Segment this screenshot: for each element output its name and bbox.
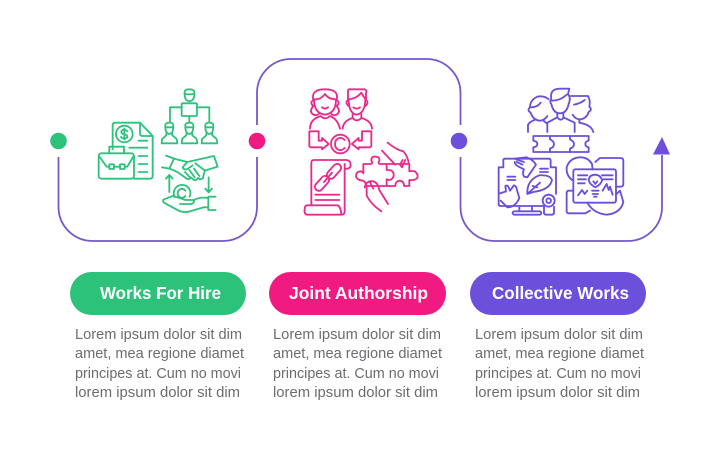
pill: Works For Hire	[70, 272, 246, 315]
text block: column 2: lorem ipsum dolor sit dim	[273, 384, 438, 401]
icon: arrows to copyright	[309, 131, 371, 153]
pill: Works For Hire: Works For Hire	[100, 283, 221, 303]
text block: column 2	[273, 326, 443, 401]
arrow head: purple triangle	[653, 137, 670, 154]
text block: column 3: amet, mea regione diamet	[475, 345, 645, 362]
marker: purple dot	[451, 133, 467, 149]
icon: org chart	[162, 89, 217, 143]
text block: column 1: principes at. Cum no movi	[75, 365, 241, 382]
timeline connector line	[58, 59, 662, 241]
marker: green dot	[50, 133, 67, 149]
text block: column 1: lorem ipsum dolor sit dim	[75, 384, 240, 401]
icon: monitor with hands and feather	[499, 157, 556, 215]
marker: pink dot	[249, 133, 265, 149]
icon: group of people	[528, 89, 593, 132]
text block: column 3: principes at. Cum no movi	[475, 365, 641, 382]
icon: puzzle strip	[533, 136, 589, 152]
icon: contract document	[113, 123, 153, 179]
text block: column 2: amet, mea regione diamet	[273, 345, 443, 362]
pill: Joint Authorship: Joint Authorship	[289, 283, 428, 303]
icon: hand with copyright coin	[163, 185, 216, 212]
pill: Joint Authorship	[269, 272, 446, 315]
icon: joint authorship	[305, 89, 418, 215]
icon: man	[343, 89, 372, 129]
text block: column 2: Lorem ipsum dolor sit dim	[273, 326, 441, 343]
text block: column 2: principes at. Cum no movi	[273, 365, 439, 382]
text block: column 1	[75, 326, 245, 401]
pill: Collective Works	[470, 272, 646, 315]
text block: column 3: Lorem ipsum dolor sit dim	[475, 326, 643, 343]
text block: column 1: amet, mea regione diamet	[75, 345, 245, 362]
text block: column 3	[475, 326, 645, 401]
icon: collective works	[499, 89, 623, 215]
text block: column 1: Lorem ipsum dolor sit dim	[75, 326, 242, 343]
icon: briefcase	[99, 147, 134, 179]
icon: scroll with chain link	[305, 160, 351, 215]
icon: works for hire	[99, 89, 218, 212]
icon: handshake	[162, 156, 218, 180]
icon: puzzle pieces with hands	[356, 143, 418, 211]
pill: Collective Works: Collective Works	[492, 283, 629, 303]
icon: woman	[310, 89, 340, 129]
icon: idea slide with speech bubbles	[567, 157, 623, 215]
text block: column 3: lorem ipsum dolor sit dim	[475, 384, 640, 401]
icon: arrows	[166, 175, 212, 192]
